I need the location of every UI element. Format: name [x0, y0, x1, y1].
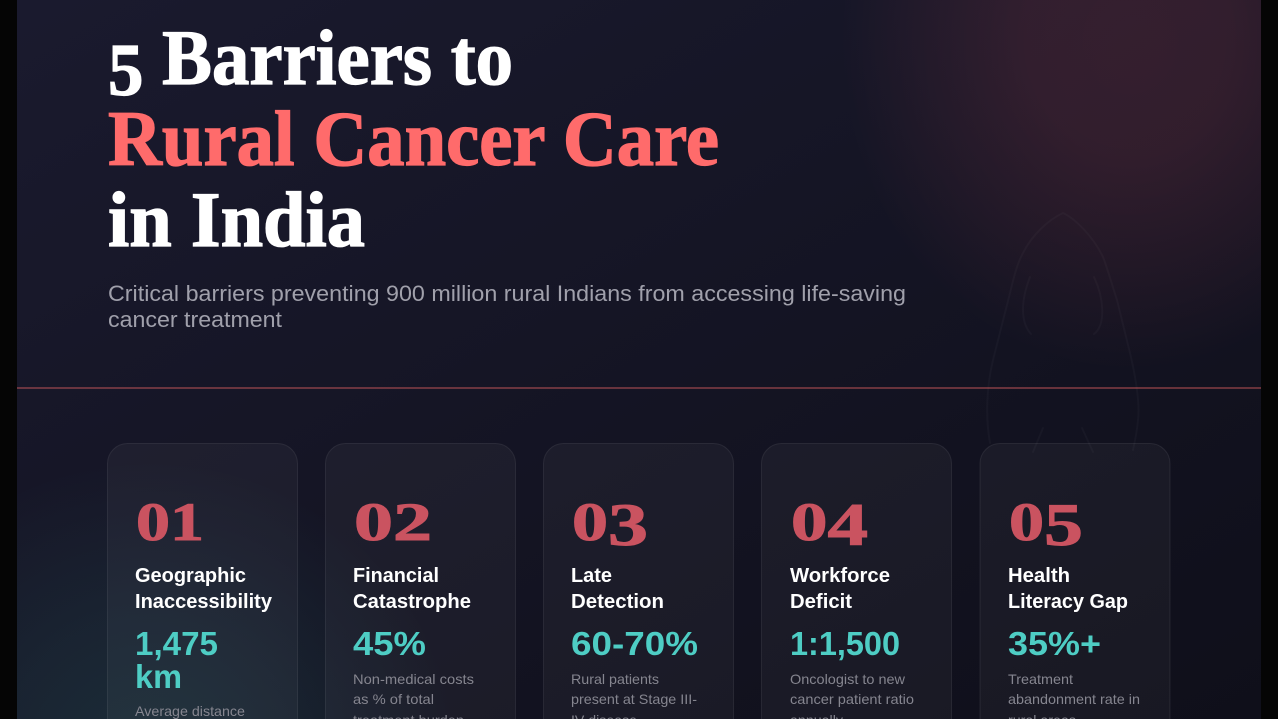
- description: [790, 671, 914, 719]
- panel: barrier 05 health literacy gap: [980, 444, 1170, 719]
- description: Non-medical costs: [353, 671, 474, 687]
- number 03: 3: [608, 492, 648, 558]
- statistic: km: [135, 658, 182, 695]
- statistic: 45%: [353, 625, 426, 662]
- subtitle: [108, 281, 906, 332]
- heading: Literacy Gap: [1008, 591, 1128, 613]
- title: Rural Cancer Care: [108, 95, 719, 182]
- heading: [571, 565, 664, 613]
- heading: [790, 565, 890, 613]
- title: [108, 14, 719, 263]
- statistic: 60-70%: [571, 625, 698, 662]
- description: Treatment: [1008, 671, 1073, 687]
- heading: [135, 565, 273, 613]
- heading: Geographic: [135, 565, 246, 587]
- panel: barrier 03 late detection: [544, 444, 734, 719]
- number 04: 0: [791, 492, 818, 552]
- statistic: 1:1,500: [790, 625, 900, 662]
- description: [571, 671, 697, 719]
- number 04: 4: [827, 492, 868, 558]
- statistic: [135, 625, 218, 695]
- number 02: 02: [354, 492, 432, 552]
- number 03: 0: [572, 492, 599, 552]
- description: present at Stage III-: [571, 691, 697, 707]
- panel: barrier 02 financial catastrophe: [326, 444, 516, 719]
- panel: barrier 04 workforce deficit: [762, 444, 952, 719]
- description: cancer patient ratio: [790, 691, 914, 707]
- heading: [353, 565, 471, 613]
- panel: barrier 01 geographic inaccessibility: [108, 444, 298, 719]
- number 01: 01: [136, 492, 204, 552]
- heading: Detection: [571, 591, 664, 613]
- title: in India: [108, 176, 365, 263]
- heading: Health: [1008, 565, 1070, 587]
- heading: Catastrophe: [353, 591, 471, 613]
- title: 5: [108, 30, 143, 112]
- description: [353, 671, 474, 719]
- heading: Financial: [353, 565, 439, 587]
- statistic: 35%+: [1008, 625, 1101, 662]
- title: Barriers to: [143, 14, 513, 101]
- description: Oncologist to new: [790, 671, 906, 687]
- description: as % of total: [353, 691, 434, 707]
- description: [1008, 671, 1140, 719]
- heading: Inaccessibility: [135, 591, 273, 613]
- description: Rural patients: [571, 671, 659, 687]
- description: Average distance: [135, 703, 245, 719]
- subtitle: Critical barriers preventing 900 million rural Indians from accessing life-saving: [108, 281, 906, 306]
- icon: faint ribbon silhouette: [987, 213, 1139, 452]
- subtitle: cancer treatment: [108, 307, 282, 332]
- statistic: 1,475: [135, 625, 218, 662]
- number 05: 0: [1009, 492, 1036, 552]
- heading: Workforce: [790, 565, 890, 587]
- number 05: 5: [1044, 492, 1083, 558]
- heading: Deficit: [790, 591, 852, 613]
- divider: [17, 387, 1261, 389]
- heading: [1008, 565, 1128, 613]
- description: abandonment rate in: [1008, 691, 1140, 707]
- heading: Late: [571, 565, 612, 587]
